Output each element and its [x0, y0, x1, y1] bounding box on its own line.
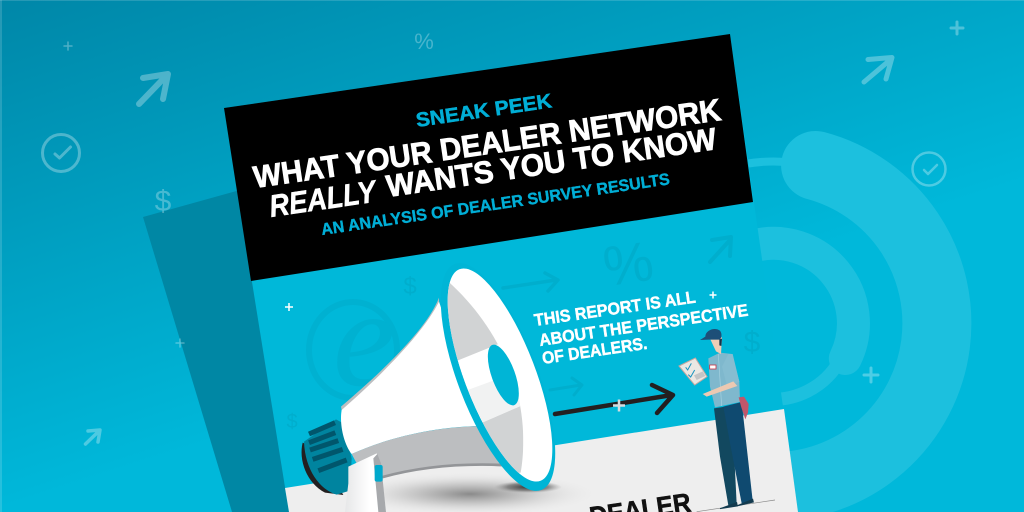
icon: faded arrow lower — [550, 378, 582, 395]
interior light band — [458, 344, 520, 422]
icon: e symbol: e — [333, 261, 395, 416]
icon: dollar lower: $ — [286, 411, 298, 433]
back teal cap — [304, 419, 352, 495]
icon: arrow top right — [864, 58, 892, 82]
eyebrow: sneak peek: SNEAK PEEK — [415, 90, 554, 132]
headline line 2 italic: REALLY — [267, 173, 381, 224]
dealer figure — [679, 329, 775, 512]
sparkle on arrow — [613, 400, 625, 412]
cap — [700, 329, 722, 340]
title block — [251, 90, 724, 239]
faded page icons — [286, 229, 761, 433]
checkmarks — [686, 363, 695, 377]
icon: dollar right: $ — [744, 326, 761, 359]
bell white rim — [426, 257, 574, 493]
cone underside — [352, 426, 507, 478]
cone body — [341, 302, 480, 454]
report page — [224, 34, 798, 512]
ground line — [697, 500, 775, 512]
sparkle — [285, 303, 293, 311]
cap ribs — [309, 423, 347, 471]
left leg — [714, 406, 737, 505]
icon: plus right — [864, 368, 878, 382]
callout text: OF DEALERS. — [541, 334, 648, 368]
icon: percent top: % — [414, 29, 434, 54]
bell outer rim — [417, 250, 579, 504]
background icons — [42, 22, 963, 444]
floor shadow under bell — [494, 481, 562, 493]
icon: plus top right — [951, 22, 963, 34]
handle — [345, 453, 386, 512]
headline line 1: WHAT YOUR DEALER NETWORK — [251, 92, 724, 195]
callout text: THIS REPORT IS ALL — [533, 288, 697, 330]
forearm — [703, 381, 737, 397]
name tag — [710, 365, 716, 369]
clipboard bar — [694, 371, 705, 380]
sparkle upper right — [710, 292, 716, 298]
icon: faded arrow — [503, 273, 558, 291]
bell interior — [448, 283, 524, 473]
back crescent — [302, 443, 343, 495]
icon: e symbol — [391, 329, 392, 334]
arrow pointing to dealer — [555, 385, 673, 414]
icon: dollar left: $ — [155, 185, 172, 218]
icon: percent: % — [599, 229, 657, 298]
hair — [719, 339, 722, 346]
icon: check circle left — [42, 134, 80, 172]
right leg — [723, 402, 753, 503]
black title banner — [224, 34, 753, 281]
placket — [718, 354, 722, 406]
sleeve — [722, 354, 739, 387]
handle button — [375, 465, 383, 482]
icon: dollar: $ — [403, 273, 417, 300]
handle shade — [373, 454, 386, 512]
torso — [708, 353, 740, 407]
icon: arrow top left — [139, 74, 168, 104]
floor shadow under megaphone — [340, 472, 600, 512]
icon: plus top left — [64, 42, 72, 50]
neck and face — [710, 337, 722, 354]
cone top shading — [341, 298, 440, 412]
bell opening — [481, 341, 525, 409]
icon: megaphone — [302, 268, 556, 512]
interior pale band — [468, 381, 520, 422]
report shadow page — [143, 190, 300, 512]
callout text: ABOUT THE PERSPECTIVE — [538, 301, 749, 350]
callout text — [533, 288, 749, 368]
icon: small arrow bottom left — [86, 430, 100, 444]
background signal arcs — [745, 162, 937, 487]
subtitle: AN ANALYSIS OF DEALER SURVEY RESULTS — [320, 170, 671, 239]
grey floor — [285, 409, 798, 512]
clipboard — [679, 358, 707, 385]
rag — [739, 397, 749, 419]
headline line 2: WANTS YOU TO KNOW — [384, 121, 719, 204]
shoes — [720, 499, 753, 509]
icon: plus left — [176, 339, 184, 347]
icon: check circle right — [912, 152, 946, 186]
icon: faded up arrow — [710, 237, 731, 262]
underside dark edge — [382, 465, 502, 477]
